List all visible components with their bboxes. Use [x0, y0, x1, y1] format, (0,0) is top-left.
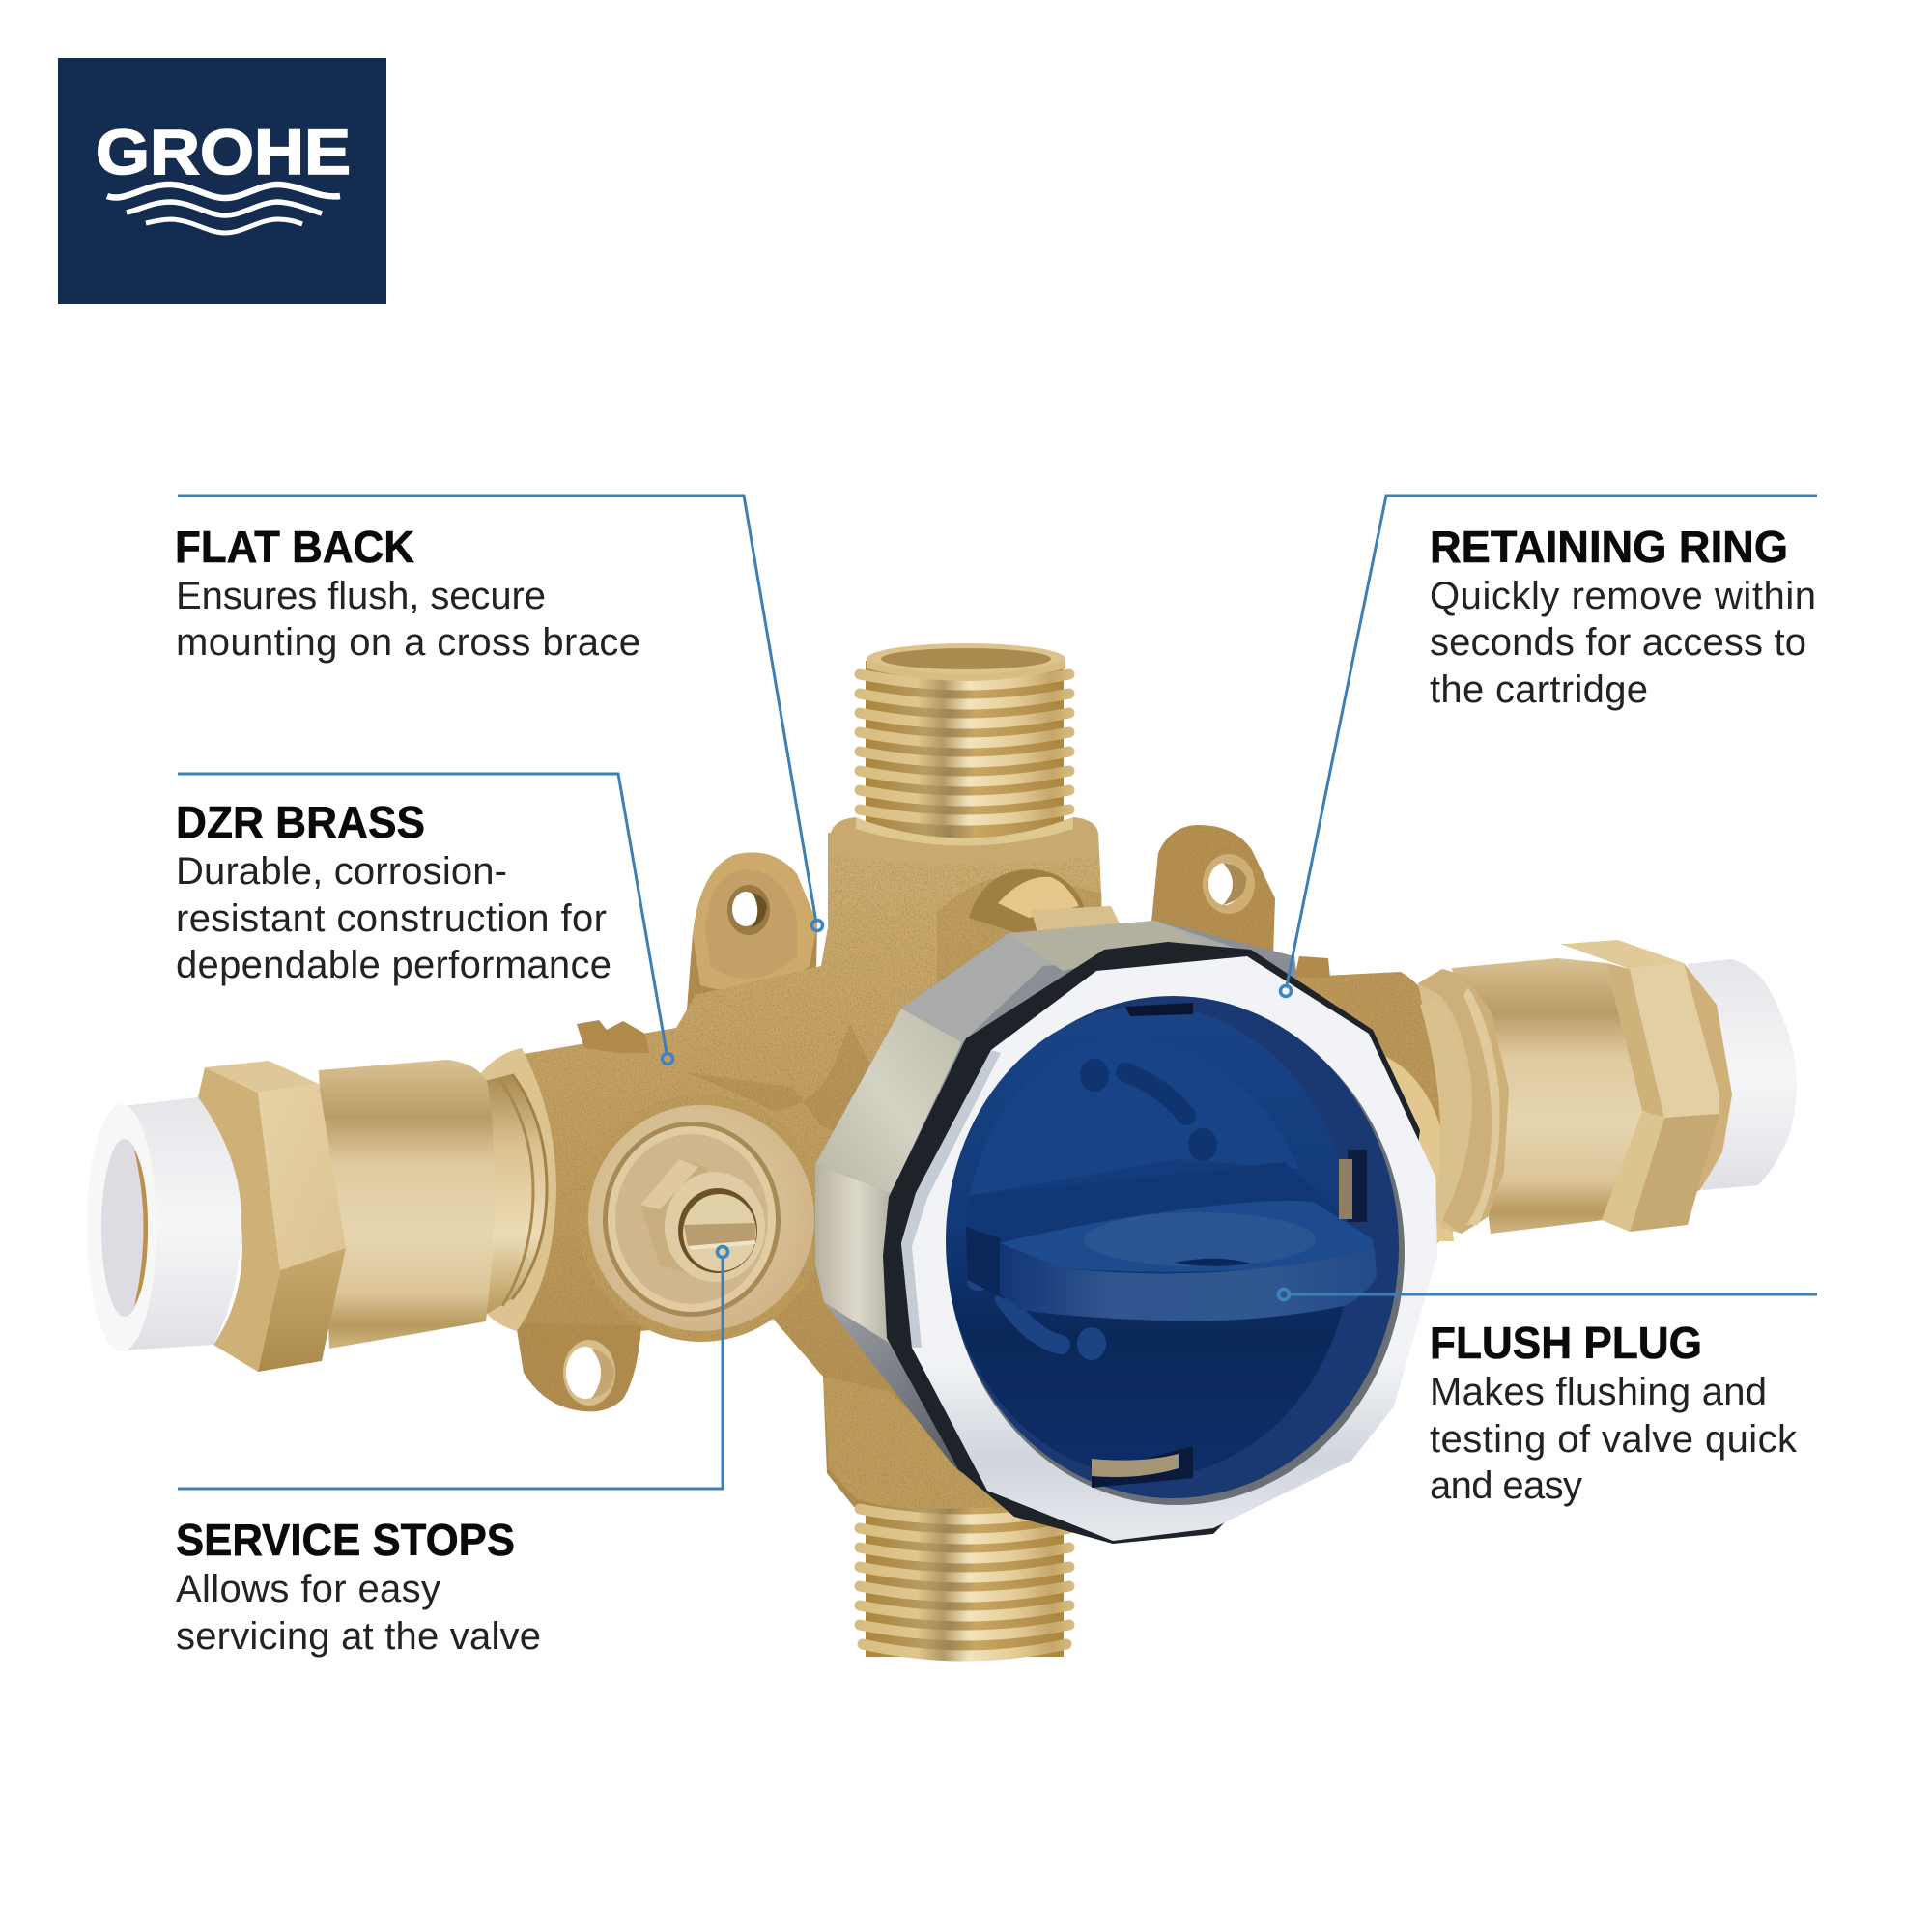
logo: GROHE	[58, 58, 386, 304]
top collar	[831, 817, 1098, 865]
description	[1430, 575, 1816, 711]
hex nut	[205, 1061, 346, 1372]
handle hole shadow	[1174, 1259, 1251, 1266]
description: Allows for easy	[176, 1568, 440, 1610]
service stop	[578, 1094, 825, 1342]
callout: flat back	[175, 496, 823, 931]
hex nut	[640, 1159, 734, 1275]
description	[176, 850, 611, 986]
logo wordmark: GROHE	[96, 116, 351, 187]
heading: RETAINING RING	[1430, 522, 1788, 572]
description	[176, 575, 640, 664]
description: dependable performance	[176, 944, 611, 986]
side port on post	[969, 869, 1121, 937]
right neck backing	[1418, 969, 1509, 1234]
cast brass body	[507, 833, 1256, 1507]
brass rib shading	[686, 1024, 869, 1140]
thread ridges	[860, 674, 1069, 820]
handle loop band	[1000, 1243, 1377, 1321]
left clip nubs	[577, 1020, 649, 1053]
callout: retaining ring	[1281, 496, 1817, 997]
right sleeve	[1452, 958, 1642, 1234]
blue flush plug	[946, 996, 1405, 1505]
right neck rings	[1420, 1002, 1471, 1236]
description: mounting on a cross brace	[176, 621, 640, 664]
bottom casting end	[823, 1377, 1005, 1509]
description: seconds for access to	[1430, 621, 1806, 664]
chrome retaining ring	[901, 956, 1437, 1541]
description	[176, 1568, 541, 1658]
description: Durable, corrosion-	[176, 850, 507, 893]
left facet	[815, 1164, 891, 1348]
callout: flush plug	[1279, 1289, 1817, 1507]
top facet	[901, 921, 1246, 1042]
brass sleeve	[319, 1060, 495, 1349]
heading: DZR BRASS	[176, 797, 425, 847]
lower left facet	[824, 1302, 961, 1473]
slotted screw head	[683, 1194, 756, 1271]
bottom mounting ear	[516, 1323, 641, 1411]
right flange	[1418, 969, 1509, 1234]
description: testing of valve quick	[1430, 1418, 1798, 1461]
right PEX connection	[1418, 940, 1797, 1236]
description	[1430, 1371, 1798, 1507]
right pipe collar	[1671, 963, 1732, 1203]
tan top facet	[1009, 921, 1203, 971]
brass collar	[198, 1067, 280, 1372]
bottom threaded pipe	[860, 1483, 1069, 1657]
handle wing	[1000, 1201, 1375, 1272]
heading: FLAT BACK	[175, 522, 414, 572]
top dark slot	[1125, 1003, 1193, 1016]
valve illustration	[87, 643, 1797, 1657]
callout: dzr brass	[176, 774, 672, 1065]
upper left facet	[815, 1009, 962, 1193]
left neck rings	[473, 1074, 547, 1321]
black o-ring gasket	[883, 942, 1420, 1544]
heading: FLUSH PLUG	[1430, 1318, 1702, 1368]
description: resistant construction for	[176, 897, 607, 940]
left PEX connection	[87, 1048, 556, 1372]
left mounting ear	[682, 852, 837, 1087]
top threaded pipe	[860, 643, 1069, 840]
right white pipe	[1688, 959, 1797, 1190]
left flange	[480, 1048, 556, 1331]
description: the cartridge	[1430, 668, 1648, 711]
plate	[946, 1006, 1351, 1477]
right hex nut	[1560, 940, 1719, 1232]
right side casting	[1285, 956, 1459, 1256]
logo waves	[107, 185, 340, 233]
heading: SERVICE STOPS	[176, 1515, 515, 1565]
handle back bar	[966, 1227, 1005, 1299]
dots and slots	[967, 1059, 1217, 1360]
description: servicing at the valve	[176, 1615, 541, 1658]
bottom metal slot	[1092, 1446, 1193, 1488]
round collar	[665, 1172, 765, 1282]
description: Makes flushing and	[1430, 1371, 1767, 1413]
description: Quickly remove within	[1430, 575, 1816, 617]
handle top surface	[1084, 1212, 1316, 1266]
callout: service stops	[176, 1246, 728, 1658]
raised top	[969, 1038, 1299, 1196]
description: and easy	[1430, 1464, 1582, 1507]
white pipe	[122, 1097, 242, 1350]
right mounting ear	[1151, 825, 1275, 956]
steel retaining body	[815, 921, 1352, 1536]
description: Ensures flush, secure	[176, 575, 546, 617]
right metal slot	[1339, 1150, 1367, 1222]
bevel	[949, 1001, 1405, 1505]
